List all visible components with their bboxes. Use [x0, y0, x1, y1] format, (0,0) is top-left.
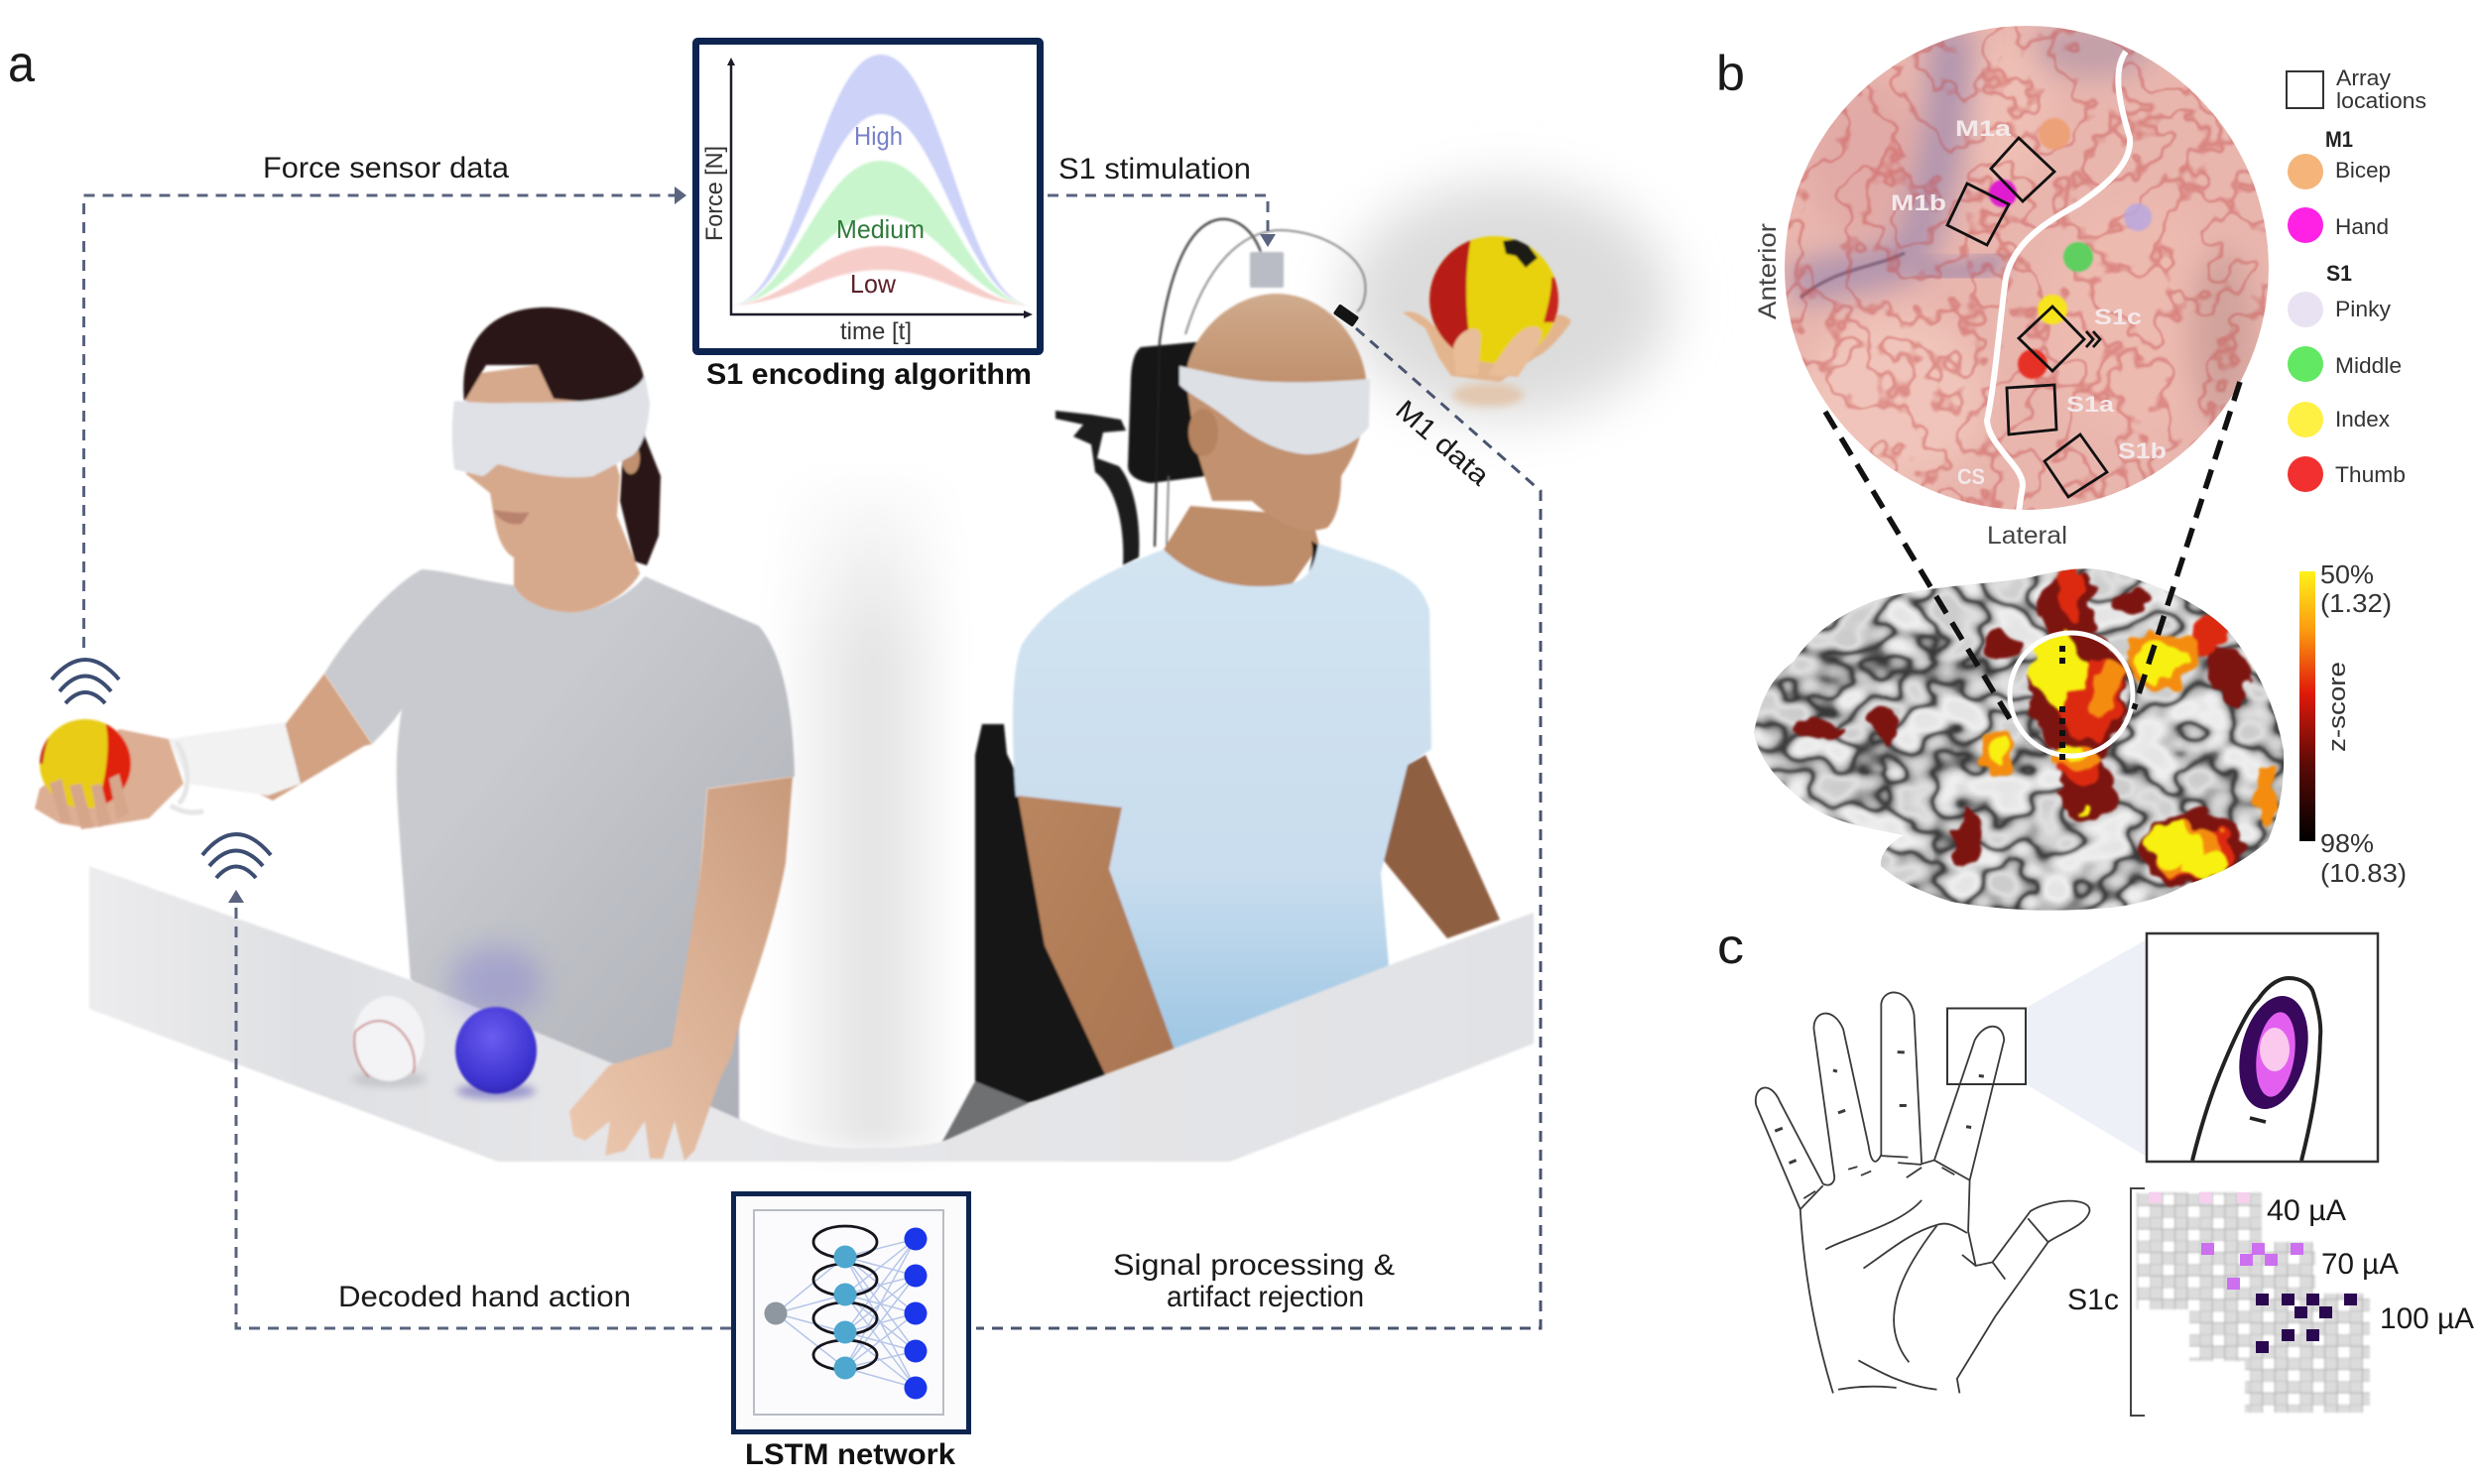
blue ball body	[455, 1007, 537, 1094]
table	[89, 866, 1534, 1162]
fine vessels	[1785, 26, 2269, 510]
hidden nodes	[833, 1246, 857, 1379]
upper right mauve	[2034, 22, 2153, 77]
ball black patch	[1503, 238, 1538, 268]
chair base	[942, 1081, 1032, 1142]
arcs	[52, 660, 119, 703]
M1a array	[1991, 138, 2054, 201]
ball: blue ball	[455, 1007, 537, 1099]
Low label: Low	[850, 269, 896, 299]
right zoom line	[2134, 382, 2240, 709]
ball red left	[1427, 239, 1472, 349]
dark red regions	[1788, 571, 2248, 884]
box	[696, 42, 1040, 351]
label: force sensor data: Force sensor data	[263, 152, 509, 185]
S1b: S1b	[2118, 438, 2167, 463]
dark field	[2229, 989, 2318, 1116]
pinky text: Pinky	[2335, 297, 2391, 321]
High label: High	[854, 121, 903, 151]
panel: LSTM network	[734, 1194, 968, 1432]
light area top	[1959, 40, 2048, 179]
right yellow	[2130, 643, 2185, 680]
z-score label: z-score	[2324, 662, 2351, 752]
left yellow	[1993, 735, 2011, 767]
far right orange	[2255, 764, 2279, 823]
output 4	[905, 1339, 927, 1363]
woman lips	[493, 510, 530, 524]
yellow regions	[1993, 635, 2229, 880]
output 5	[905, 1377, 927, 1399]
panel: S1c stimulation grids	[2067, 1188, 2474, 1416]
man face	[1185, 377, 1367, 531]
man shirt	[1013, 544, 1431, 1091]
connections	[776, 1239, 916, 1388]
S1c: S1c	[2094, 305, 2142, 329]
central orange	[2082, 657, 2128, 722]
70 label: 70 µA	[2321, 1248, 2399, 1281]
axes	[731, 62, 1030, 314]
woman left arm with ball	[35, 674, 372, 829]
lower center	[2059, 749, 2103, 789]
dot: thumb	[2018, 349, 2047, 379]
grey cable	[1167, 230, 1365, 547]
cortex base	[1785, 26, 2269, 510]
ball seam	[354, 1021, 415, 1077]
y axis label: Force [N]	[701, 146, 728, 241]
label: M1 data: M1 data	[1390, 394, 1496, 492]
bottom yellow 2	[2185, 850, 2229, 880]
S1c label: S1c	[2067, 1284, 2119, 1316]
dark vein	[1800, 253, 1905, 298]
bottom orange	[2152, 822, 2223, 874]
M1b array	[1947, 184, 2009, 245]
force sensor band	[169, 722, 301, 796]
purple vein lateral	[1910, 260, 2004, 272]
loop 2	[813, 1264, 877, 1296]
thumb swatch	[2288, 456, 2323, 492]
S1c array	[2019, 307, 2084, 371]
figure: woman torso	[324, 308, 795, 1131]
medium field	[2251, 1010, 2300, 1099]
hand swatch	[2288, 207, 2323, 243]
patch 10	[2216, 645, 2248, 704]
70 uA active	[2201, 1243, 2303, 1290]
man ear	[1188, 409, 1218, 456]
small knuckle ticks	[1775, 1052, 1984, 1163]
force sensor data arrow	[83, 195, 675, 648]
grid 40 uA	[2137, 1192, 2262, 1309]
medium band	[732, 161, 1030, 306]
S1c chevron	[2086, 331, 2100, 347]
bicep swatch	[2288, 154, 2323, 189]
arcs	[202, 834, 271, 878]
inner frame	[754, 1210, 943, 1415]
brain highlight circle	[2010, 633, 2133, 756]
recurrent loops	[813, 1226, 877, 1370]
Medium label: Medium	[836, 214, 925, 244]
cortex labels	[1891, 116, 2167, 489]
patch 6	[2041, 571, 2096, 639]
ball base	[38, 717, 129, 809]
colorbar	[2299, 559, 2407, 888]
dot: pinky	[2124, 203, 2152, 231]
dot: bicep	[2039, 118, 2070, 150]
right	[2187, 615, 2227, 655]
palm	[1403, 311, 1571, 382]
ball: white baseball	[351, 996, 427, 1087]
index text: Index	[2335, 407, 2390, 432]
figure: man in wheelchair	[942, 219, 1500, 1142]
loop 3	[813, 1302, 877, 1334]
node 4	[833, 1357, 857, 1379]
gyri texture	[1746, 565, 2292, 913]
ball red right	[1544, 273, 1562, 322]
node 1	[833, 1246, 857, 1268]
woman shirt	[324, 569, 795, 1131]
woman hair	[463, 308, 661, 565]
cables	[1155, 219, 1261, 547]
woman blindfold	[452, 375, 650, 477]
hand text: Hand	[2335, 214, 2389, 239]
array square	[2287, 71, 2323, 108]
label: anterior: Anterior	[1754, 223, 1782, 319]
light area lower left	[1805, 312, 1984, 481]
strip top	[2057, 567, 2083, 623]
brain surface	[1746, 565, 2292, 913]
1.32 label: (1.32)	[2320, 588, 2392, 618]
panel letter b: b	[1716, 46, 1745, 101]
patch frontal 1	[1788, 720, 1839, 740]
S1a: S1a	[2066, 392, 2115, 417]
label: lateral: Lateral	[1987, 522, 2067, 550]
man neck	[1164, 506, 1319, 590]
panel: fingertip inset	[2147, 933, 2378, 1162]
palm	[35, 729, 184, 828]
S1 stimulation arrow	[1048, 195, 1268, 236]
hand outline	[1756, 992, 2090, 1393]
red regions	[2050, 567, 2237, 879]
panel: cortex photo	[1785, 22, 2269, 511]
patch 8	[2058, 753, 2118, 824]
tip yellow	[2075, 801, 2085, 816]
middle swatch	[2288, 346, 2323, 382]
gradient bar	[2299, 571, 2315, 841]
left orange	[1981, 730, 2017, 778]
panel: S1 encoding algorithm	[696, 42, 1040, 351]
central yellow	[2033, 635, 2084, 704]
hand shadow	[1452, 383, 1524, 407]
patch 7	[2029, 629, 2128, 760]
icon: wireless top	[52, 660, 119, 703]
M1 connector	[1333, 304, 1359, 327]
output nodes	[905, 1228, 927, 1399]
label: signal processing	[1113, 1249, 1395, 1313]
array marker dots on brain	[2059, 646, 2065, 764]
lower yellow	[2059, 745, 2087, 763]
blue ball shadow	[456, 1083, 536, 1099]
decoded action line	[236, 903, 731, 1328]
bracket	[2131, 1188, 2145, 1416]
S1 heading: S1	[2326, 261, 2352, 286]
dot: hand	[1989, 180, 2017, 207]
node 2	[833, 1284, 857, 1305]
arrays	[1947, 138, 2107, 497]
man skin arm left	[1018, 796, 1180, 1091]
arrowhead decoded	[228, 890, 244, 903]
woman ear	[622, 442, 640, 474]
input node	[764, 1301, 788, 1325]
grey halo behind ball	[1344, 184, 1672, 418]
10.83 label: (10.83)	[2320, 858, 2407, 888]
outline	[1756, 992, 2090, 1393]
central sulcus line	[1987, 52, 2130, 511]
dot: middle	[2063, 242, 2093, 272]
icon: wireless bottom	[202, 834, 271, 878]
patch 11	[2115, 586, 2151, 614]
middle text: Middle	[2335, 353, 2402, 378]
upper arm	[238, 674, 372, 801]
patch 5	[2208, 646, 2232, 689]
patch 9	[2141, 812, 2244, 884]
node 3	[833, 1321, 857, 1343]
M1b: M1b	[1891, 190, 1946, 215]
loop 4	[813, 1340, 877, 1370]
man skin arm right	[1381, 755, 1500, 938]
arrowhead S1 stimulation	[1260, 234, 1276, 247]
implant pedestal	[1250, 252, 1284, 288]
woman neck and face	[466, 365, 640, 612]
label: S1 stimulation: S1 stimulation	[1058, 153, 1251, 186]
label: decoded hand action: Decoded hand action	[338, 1281, 631, 1313]
40 uA active	[2149, 1192, 2250, 1203]
orange regions	[1981, 632, 2279, 874]
collar dark	[1302, 541, 1321, 587]
output 3	[905, 1301, 927, 1325]
wrist straps	[171, 742, 203, 812]
bottom yellow 1	[2145, 821, 2200, 865]
bicep text: Bicep	[2335, 158, 2391, 183]
woman right arm and hand	[569, 777, 793, 1161]
pinky swatch	[2288, 292, 2323, 327]
central	[2050, 650, 2136, 749]
output 2	[905, 1264, 927, 1288]
wheelchair frame	[942, 724, 1113, 1142]
legend: cortical map	[2287, 65, 2426, 492]
panel letter a: a	[8, 36, 35, 93]
ball shadow	[351, 1071, 427, 1087]
bottom right	[2158, 827, 2237, 879]
thumb text: Thumb	[2335, 462, 2406, 487]
sensor ball	[38, 717, 133, 809]
dot: index	[2038, 295, 2067, 324]
output 1	[905, 1228, 927, 1250]
ball yellow	[1428, 234, 1562, 365]
light field	[2260, 1028, 2290, 1071]
vertical shadow pillar	[734, 456, 1002, 1151]
heading: S1 encoding algorithm: S1 encoding algorithm	[706, 358, 1032, 391]
M1 data line	[976, 328, 1541, 1328]
creases	[1800, 1156, 2048, 1390]
patch 3	[1985, 634, 2021, 658]
hand holding ball	[1403, 234, 1571, 407]
S1b array	[2045, 434, 2107, 497]
98% label: 98%	[2320, 828, 2374, 858]
outer box	[734, 1194, 968, 1432]
line 2: artifact rejection	[1167, 1281, 1364, 1313]
fingers	[50, 774, 129, 829]
fingers on ball	[1453, 326, 1542, 377]
x arrow	[727, 58, 1033, 318]
blue glow on shirt	[450, 946, 542, 1018]
x axis label: time [t]	[840, 318, 912, 345]
force data line	[83, 195, 675, 648]
light area center	[2044, 198, 2222, 436]
line 1: Signal processing &	[1113, 1249, 1395, 1282]
zoom wedge	[2026, 939, 2147, 1157]
red panel	[101, 722, 133, 804]
headrest arm	[1055, 411, 1139, 565]
grid 100 uA	[2245, 1294, 2370, 1413]
panel letter c: c	[1717, 919, 1744, 974]
patch frontal 2	[1873, 704, 1897, 744]
held ball	[1428, 234, 1562, 365]
purple sulcal veins	[1794, 30, 1951, 289]
Array text: Array	[2336, 65, 2391, 90]
locations text: locations	[2336, 88, 2426, 113]
right orange	[2123, 632, 2198, 687]
low band	[732, 246, 1030, 306]
high band	[732, 55, 1030, 306]
S1a array	[2007, 385, 2056, 434]
white ball body	[353, 996, 425, 1081]
index swatch	[2288, 402, 2323, 437]
red left panel	[38, 737, 50, 766]
arrowhead force data	[675, 186, 686, 204]
dark right gyrus	[2188, 248, 2256, 427]
hand selection box	[1947, 1008, 2026, 1084]
40 label: 40 µA	[2267, 1194, 2346, 1227]
man blindfold	[1179, 366, 1370, 454]
tick	[2250, 1118, 2266, 1122]
headrest	[1128, 341, 1205, 483]
lower orange	[2056, 747, 2100, 771]
100 uA active	[2256, 1294, 2357, 1353]
M1 heading: M1	[2325, 127, 2353, 152]
upper left pink	[1805, 79, 1924, 238]
heading: LSTM network: LSTM network	[745, 1438, 955, 1471]
zoom lines from brain to cortex	[1825, 382, 2240, 727]
man bald head	[1185, 294, 1367, 389]
finger outline	[2192, 978, 2320, 1161]
left zoom line	[1825, 412, 2015, 727]
inset frame	[2147, 933, 2378, 1162]
lighter gyrus	[1805, 22, 2256, 481]
activation blobs	[1788, 567, 2279, 884]
M1a: M1a	[1955, 116, 2012, 141]
grid 70 uA	[2189, 1242, 2315, 1361]
CS: CS	[1957, 464, 1985, 489]
100 label: 100 µA	[2380, 1302, 2474, 1335]
patch 4	[1955, 813, 1979, 869]
50% label: 50%	[2320, 559, 2374, 589]
loop 1	[813, 1226, 877, 1258]
